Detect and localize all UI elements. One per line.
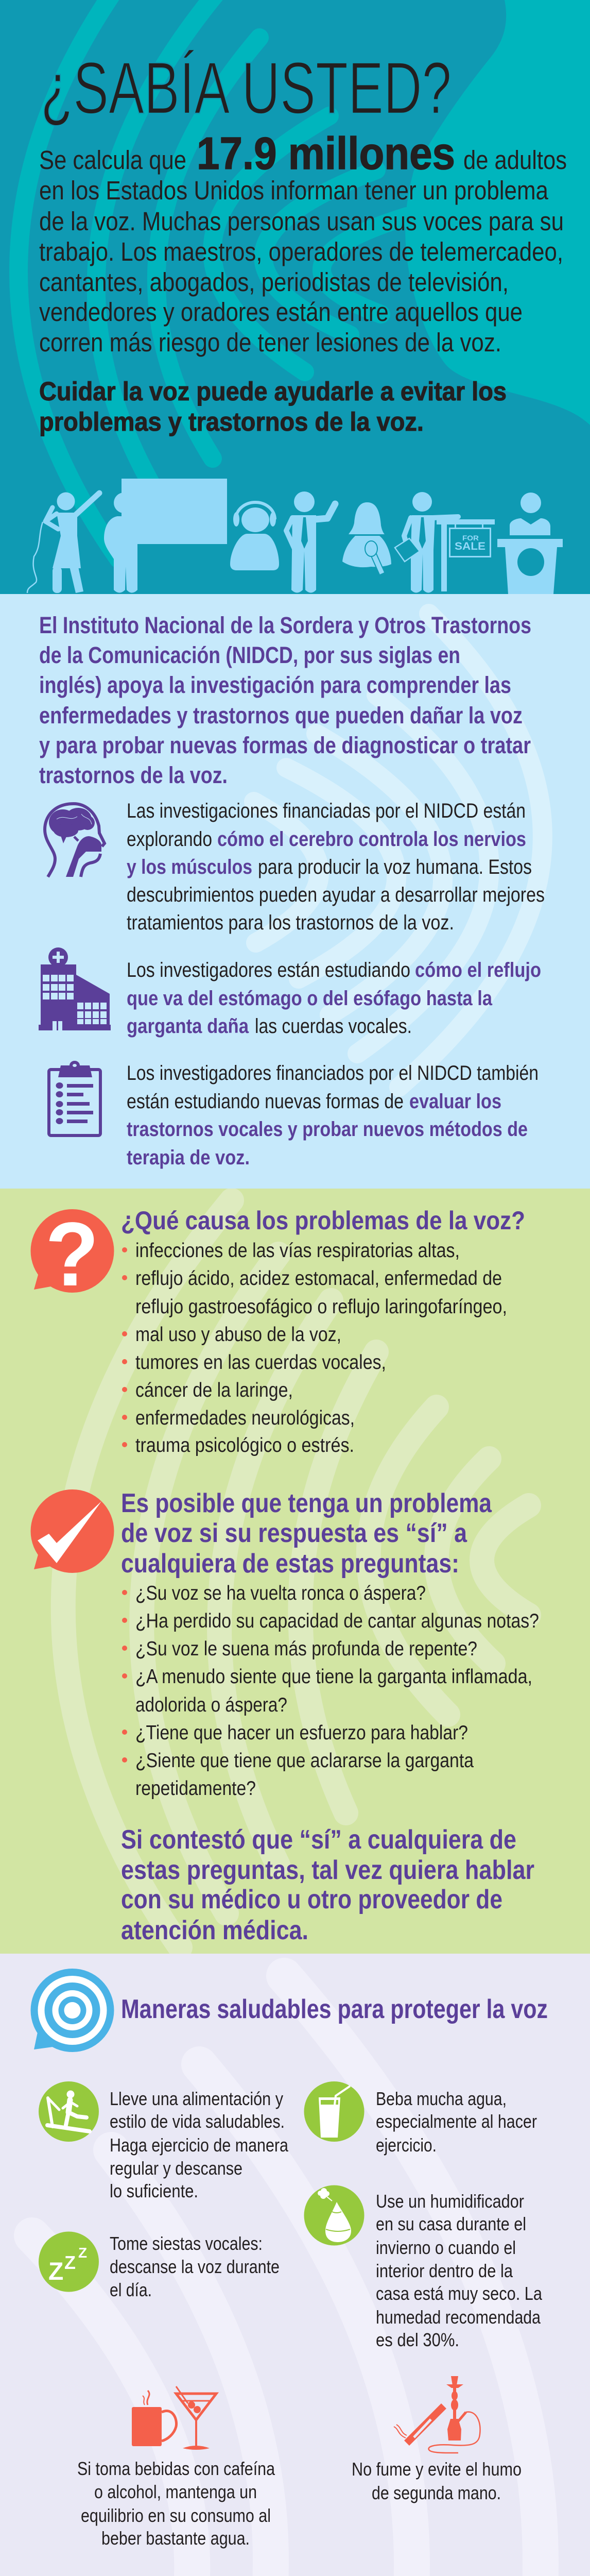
icon: sleeping zzz: Z xyxy=(78,2245,87,2261)
text: caffeine and alcohol: o alcohol, mantenga un xyxy=(94,2481,257,2502)
list: causes: cáncer de la laringe, xyxy=(135,1379,293,1401)
callout: see a doctor: atención médica. xyxy=(121,1916,308,1945)
icon: sleeping zzz: Z xyxy=(48,2258,63,2285)
icon: sales agent with sign: FOR xyxy=(462,534,479,542)
list: causes: reflujo gastroesofágico o reflujo laringofaríngeo, xyxy=(135,1296,507,1318)
icon: drinking glass xyxy=(304,2081,365,2142)
paragraph: evaluation research xyxy=(127,1062,539,1169)
text: humidifier: Use un humidificador xyxy=(376,2191,524,2212)
heading: symptoms xyxy=(121,1488,492,1579)
paragraph: reflux research: garganta daña xyxy=(127,1015,249,1038)
text: vocal naps: Tome siestas vocales: xyxy=(110,2233,263,2254)
paragraph: brain research: explorando xyxy=(127,828,212,851)
statistic paragraph: corren más riesgo de tener lesiones de la voz. xyxy=(39,328,501,357)
intro text: inglés) apoya la investigación para comprender las xyxy=(39,672,511,698)
text: humidifier: casa está muy seco. La xyxy=(376,2283,543,2304)
icon: cigarette and hookah xyxy=(394,2376,480,2453)
text: drink water: ejercicio. xyxy=(376,2134,437,2156)
statistic paragraph: vendedores y oradores están entre aquellos que xyxy=(39,297,523,327)
paragraph: brain research: Las investigaciones financiadas por el NIDCD están xyxy=(127,800,526,822)
text: diet and exercise: regular y descanse xyxy=(110,2158,242,2179)
text: humidifier: invierno o cuando el xyxy=(376,2237,516,2258)
paragraph: reflux research: las cuerdas vocales. xyxy=(255,1015,412,1038)
text: vocal naps: el día. xyxy=(110,2279,152,2300)
callout: see a doctor: Si contestó que “sí” a cualquiera de xyxy=(121,1825,516,1855)
list: causes: tumores en las cuerdas vocales, xyxy=(135,1351,386,1374)
callout: see a doctor xyxy=(121,1825,534,1945)
icon: target bubble xyxy=(31,1969,114,2052)
text: drink water xyxy=(376,2088,537,2156)
icon: singer xyxy=(27,493,99,593)
text: diet and exercise: Lleve una alimentación y xyxy=(110,2088,283,2109)
icon: sleeping zzz xyxy=(39,2232,99,2292)
icon: humidifier xyxy=(304,2185,365,2245)
text: humidifier: humedad recomendada xyxy=(376,2307,541,2328)
bold takeaway: problemas y trastornos de la voz. xyxy=(39,407,424,436)
paragraph: brain research xyxy=(127,800,545,934)
icon: check mark bubble xyxy=(31,1489,114,1573)
list: symptom questions: ¿Siente que tiene que aclararse la garganta xyxy=(135,1750,474,1772)
list: causes xyxy=(122,1240,507,1456)
list: symptom questions: ¿Ha perdido su capacidad de cantar algunas notas? xyxy=(135,1610,539,1632)
paragraph: reflux research: Los investigadores están estudiando xyxy=(127,959,410,981)
paragraph: evaluation research: evaluar los xyxy=(409,1090,501,1113)
list: symptom questions xyxy=(122,1582,539,1800)
callout: see a doctor: con su médico u otro proveedor de xyxy=(121,1885,502,1914)
list: causes: reflujo ácido, acidez estomacal, enfermedad de xyxy=(135,1267,502,1290)
bold takeaway: Cuidar la voz puede ayudarle a evitar los xyxy=(39,377,507,406)
list: causes: mal uso y abuso de la voz, xyxy=(135,1324,341,1346)
icon: treadmill xyxy=(39,2081,99,2142)
list: symptom questions: ¿Tiene que hacer un esfuerzo para hablar? xyxy=(135,1722,468,1744)
icon: sales agent with sign xyxy=(395,492,495,592)
icon: question mark bubble: ? xyxy=(45,1204,99,1305)
panel: healthy ways to protect the voice xyxy=(0,1954,590,2576)
list: symptom questions: ¿Su voz le suena más profunda de repente? xyxy=(135,1638,477,1660)
list: causes: enfermedades neurológicas, xyxy=(135,1407,355,1429)
paragraph: brain research: y los músculos xyxy=(127,856,252,878)
panel: did you know hero xyxy=(0,0,590,594)
heading: causes: ¿Qué causa los problemas de la voz? xyxy=(121,1206,525,1235)
text: diet and exercise: estilo de vida saludables. xyxy=(110,2111,285,2132)
paragraph: evaluation research: están estudiando nuevas formas de xyxy=(127,1090,404,1113)
icon: sleeping zzz: Z xyxy=(64,2252,76,2273)
icon: lawyer xyxy=(286,492,335,592)
paragraph: reflux research: cómo el reflujo xyxy=(415,959,541,981)
text: caffeine and alcohol xyxy=(77,2458,275,2549)
icon: speaker at podium xyxy=(497,493,563,594)
icon: sales agent with sign: SALE xyxy=(455,540,485,552)
panel: NIDCD research xyxy=(0,594,590,1189)
list: symptom questions: ¿A menudo siente que tiene la garganta inflamada, xyxy=(135,1666,532,1688)
intro text: trastornos de la voz. xyxy=(39,762,228,788)
icon: whiteboard xyxy=(122,479,227,544)
icon: clipboard checklist xyxy=(49,1061,100,1136)
icon: head and brain xyxy=(45,804,105,877)
intro text xyxy=(39,612,531,788)
icon: hospital xyxy=(39,947,111,1030)
icon: coffee mug and martini xyxy=(132,2386,216,2450)
text: humidifier xyxy=(376,2191,543,2350)
icon: teacher xyxy=(104,493,156,592)
text: caffeine and alcohol: beber bastante agua. xyxy=(101,2528,250,2549)
paragraph: reflux research xyxy=(127,959,541,1038)
text: do not smoke: No fume y evite el humo xyxy=(352,2459,522,2480)
heading: symptoms: cualquiera de estas preguntas: xyxy=(121,1549,459,1579)
list: symptom questions: repetidamente? xyxy=(135,1777,256,1800)
text: caffeine and alcohol: equilibrio en su consumo al xyxy=(81,2505,271,2526)
text: vocal naps xyxy=(110,2233,280,2300)
paragraph: evaluation research: trastornos vocales y probar nuevos métodos de xyxy=(127,1118,528,1141)
statistic paragraph: de adultos xyxy=(463,145,567,175)
list: symptom questions: ¿Su voz se ha vuelta ronca o áspera? xyxy=(135,1582,426,1604)
text: diet and exercise: lo suficiente. xyxy=(110,2180,198,2201)
statistic paragraph: 17.9 millones xyxy=(197,128,455,179)
paragraph: brain research: cómo el cerebro controla los nervios xyxy=(217,828,526,851)
text: humidifier: es del 30%. xyxy=(376,2329,459,2350)
paragraph: evaluation research: terapia de voz. xyxy=(127,1146,250,1169)
text: diet and exercise xyxy=(110,2088,289,2201)
text: drink water: especialmente al hacer xyxy=(376,2111,537,2132)
bold takeaway xyxy=(39,377,507,436)
icon: telemarketer with headset xyxy=(230,502,279,570)
list: causes: infecciones de las vías respiratorias altas, xyxy=(135,1240,460,1262)
text: drink water: Beba mucha agua, xyxy=(376,2088,507,2109)
paragraph: brain research: tratamientos para los trastornos de la voz. xyxy=(127,911,454,934)
intro text: de la Comunicación (NIDCD, por sus siglas en xyxy=(39,642,460,668)
panel: causes and symptoms xyxy=(0,1189,590,1954)
list: causes: trauma psicológico o estrés. xyxy=(135,1434,354,1456)
statistic paragraph: cantantes, abogados, periodistas de televisión, xyxy=(39,267,509,297)
heading: symptoms: de voz si su respuesta es “sí” a xyxy=(121,1518,467,1548)
text: humidifier: interior dentro de la xyxy=(376,2260,513,2281)
icon: television reporter xyxy=(342,502,391,573)
icon: question mark bubble xyxy=(31,1204,114,1305)
paragraph: brain research: para producir la voz humana. Estos xyxy=(258,856,532,878)
paragraph: reflux research: que va del estómago o del esófago hasta la xyxy=(127,987,493,1010)
text: diet and exercise: Haga ejercicio de manera xyxy=(110,2134,289,2156)
text: do not smoke: de segunda mano. xyxy=(372,2482,501,2503)
text: do not smoke xyxy=(352,2459,522,2503)
heading: symptoms: Es posible que tenga un problema xyxy=(121,1488,492,1518)
statistic paragraph xyxy=(39,128,567,357)
statistic paragraph: Se calcula que xyxy=(39,145,186,175)
text: humidifier: en su casa durante el xyxy=(376,2213,526,2234)
text: vocal naps: descanse la voz durante xyxy=(110,2256,280,2277)
list: symptom questions: adolorida o áspera? xyxy=(135,1694,287,1716)
callout: see a doctor: estas preguntas, tal vez quiera hablar xyxy=(121,1855,534,1885)
text: caffeine and alcohol: Si toma bebidas con cafeína xyxy=(77,2458,275,2479)
